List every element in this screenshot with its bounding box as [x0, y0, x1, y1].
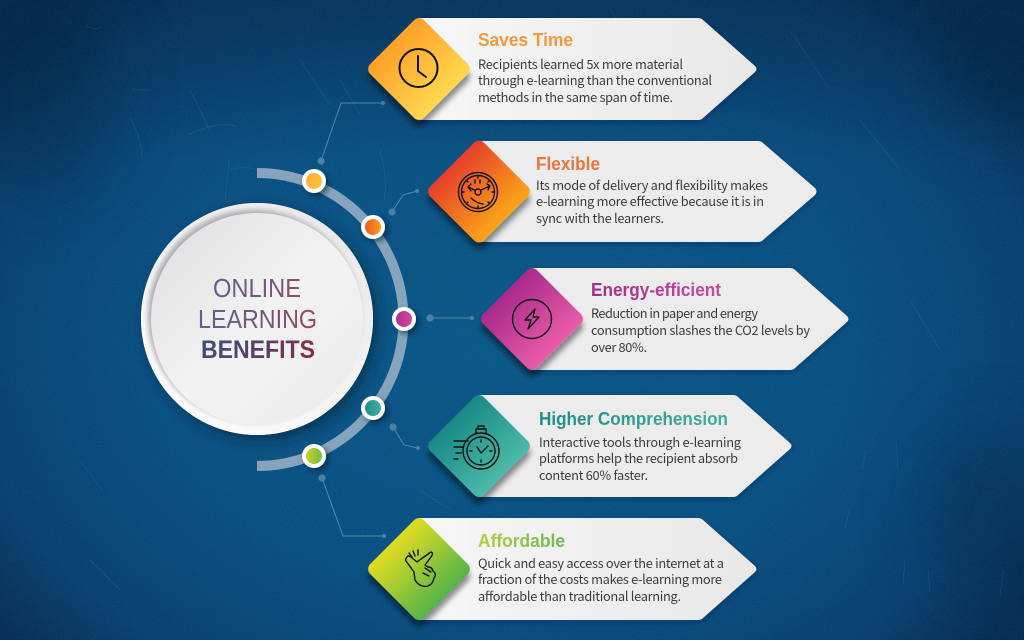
central circle: [141, 203, 373, 435]
text: energy-efficient description: Reduction in paper and energy: [591, 303, 758, 322]
text: saves time description: through e-learning than the conventional: [478, 70, 712, 89]
heading: flexible: Flexible: [536, 153, 600, 174]
title: online learning benefits: BENEFITS: [201, 336, 315, 364]
icon: stopwatch: [454, 426, 499, 469]
panel: affordable: [365, 515, 756, 623]
heading: affordable: Affordable: [478, 530, 565, 551]
icon: snapping fingers hand: [406, 550, 435, 586]
text: flexible description: Its mode of delivery and flexibility makes: [536, 175, 768, 194]
text: saves time description: methods in the same span of time.: [478, 87, 673, 106]
marker dots on the arc: [302, 169, 416, 468]
text: saves time description: [478, 54, 712, 106]
title: online learning benefits: ONLINE: [213, 273, 301, 303]
text: higher comprehension description: [539, 432, 742, 484]
text: saves time description: Recipients learned 5x more material: [478, 54, 683, 73]
text: affordable description: Quick and easy access over the internet at a: [478, 553, 724, 572]
text: higher comprehension description: content 60% faster.: [539, 465, 648, 484]
semicircular arc: [257, 173, 403, 466]
heading: saves time: Saves Time: [478, 29, 573, 50]
text: affordable description: fraction of the costs makes e-learning more: [478, 569, 722, 588]
heading: energy-efficient: Energy-efficient: [591, 279, 721, 300]
text: higher comprehension description: platforms help the recipient absorb: [539, 448, 738, 467]
text: energy-efficient description: consumption slashes the CO2 levels by: [591, 320, 810, 339]
title: online learning benefits: LEARNING: [198, 304, 317, 334]
text: affordable description: [478, 553, 724, 605]
panel: energy-efficient: [478, 265, 848, 373]
heading: higher comprehension: Higher Comprehension: [539, 408, 728, 429]
title: online learning benefits: [198, 273, 317, 364]
text: flexible description: [536, 175, 768, 227]
text: flexible description: sync with the learners.: [536, 208, 664, 227]
panel: higher comprehension: [425, 392, 792, 500]
connector lines: [317, 101, 474, 538]
icon: lightning bolt: [512, 300, 552, 338]
text: energy-efficient description: over 80%.: [591, 337, 647, 356]
text: energy-efficient description: [591, 303, 810, 356]
text: affordable description: affordable than traditional learning.: [478, 586, 681, 605]
text: higher comprehension description: Interactive tools through e-learning: [539, 432, 742, 451]
panel: flexible: [425, 138, 816, 245]
icon: clock: [400, 49, 438, 87]
icon: clock with arrows: [458, 172, 498, 212]
panel: saves time: [365, 15, 756, 123]
text: flexible description: e-learning more effective because it is in: [536, 191, 764, 210]
